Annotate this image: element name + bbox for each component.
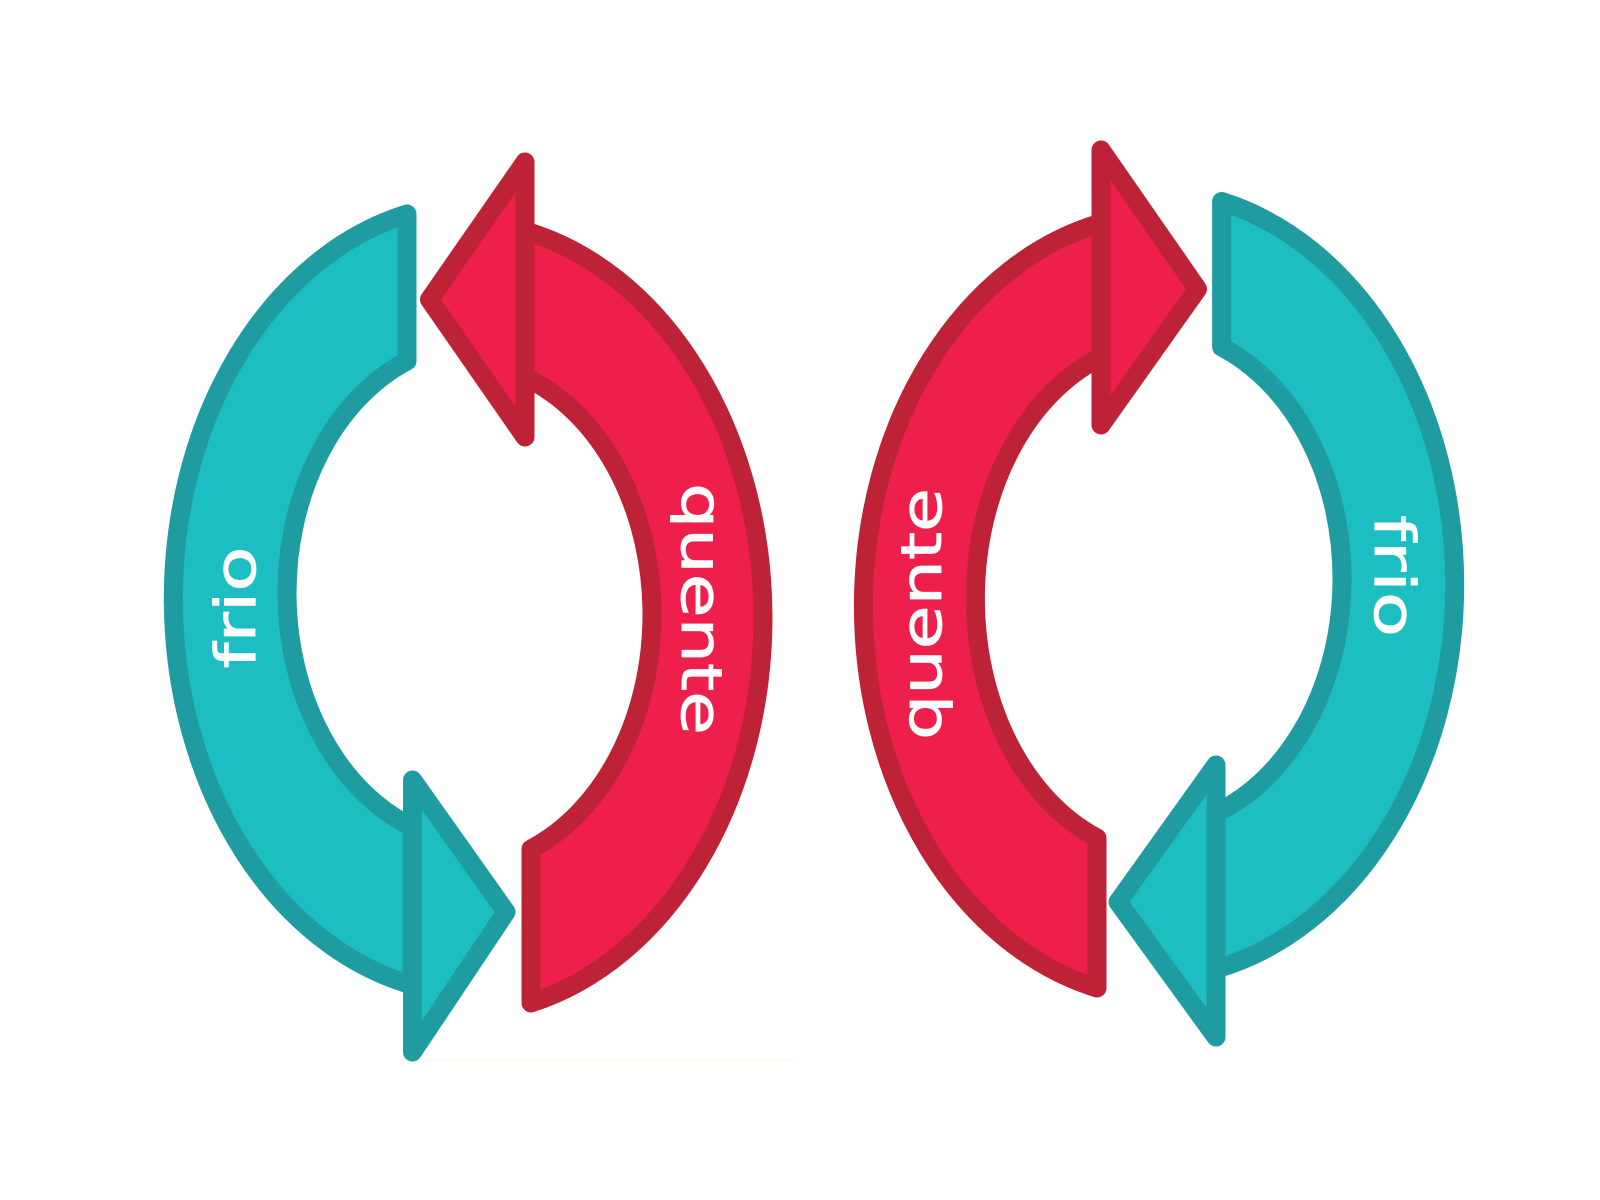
left cycle (173, 162, 763, 1052)
label: left quente: quente (668, 483, 733, 735)
label: right quente: quente (890, 488, 955, 740)
arrow: left quente (430, 162, 763, 1003)
arrow: left frio (173, 214, 506, 1052)
label: right frio: frio (1361, 515, 1426, 637)
arrow: right frio (1118, 202, 1455, 1037)
right cycle (863, 150, 1455, 1037)
arrow: right quente (863, 150, 1198, 988)
label: left frio: frio (204, 546, 269, 668)
